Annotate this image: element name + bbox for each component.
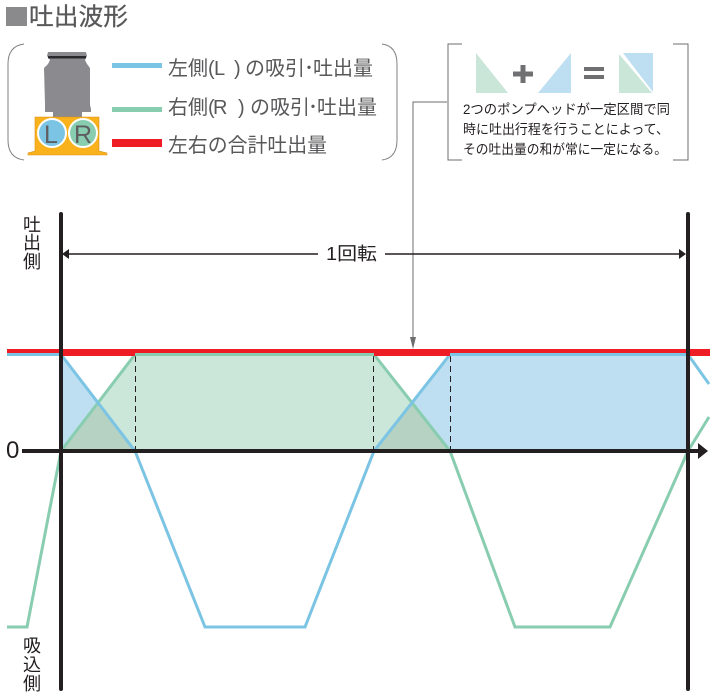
dashed guides bbox=[136, 356, 450, 451]
legend item: right: R bbox=[213, 97, 227, 119]
axis line: start bbox=[59, 212, 63, 691]
line: total discharge bbox=[7, 349, 710, 356]
icon: blue triangle bbox=[538, 53, 571, 93]
legend item: right: 吐出量 bbox=[317, 96, 377, 119]
line: left pump bbox=[7, 354, 709, 627]
arrow: one rotation bbox=[62, 244, 686, 264]
legend item: right: ･ bbox=[308, 97, 318, 119]
label: discharge side: 出 bbox=[23, 233, 41, 253]
legend bracket bbox=[8, 44, 397, 160]
area: left pump first bbox=[61, 355, 135, 451]
icon: pump with L and R heads bbox=[28, 52, 107, 155]
legend item: left: L bbox=[214, 58, 225, 80]
axis line: end bbox=[686, 212, 690, 691]
icon: green triangle bbox=[476, 53, 508, 93]
legend item: left: の吸引 bbox=[245, 57, 305, 80]
legend item: left: ･ bbox=[304, 58, 314, 80]
area: overlap first bbox=[61, 404, 135, 451]
label: discharge side: 吐 bbox=[23, 215, 41, 235]
icon: combined rectangle bbox=[619, 53, 653, 93]
label: zero: 0 bbox=[6, 437, 19, 464]
legend item: right: 右側 bbox=[168, 96, 208, 119]
callout text: 2つのポンプヘッドが一定区間で同 bbox=[463, 102, 670, 117]
callout: constant sum explanation bbox=[448, 44, 688, 160]
label: suction side: 込 bbox=[23, 655, 41, 675]
area: left pump second bbox=[374, 355, 688, 451]
chart: discharge waveform bbox=[6, 212, 710, 694]
label: discharge side bbox=[23, 215, 41, 272]
icon: equals bbox=[584, 69, 604, 77]
icon: pump with L and R heads: L bbox=[44, 121, 58, 149]
arrow: callout leader bbox=[410, 102, 447, 349]
callout text: 時に吐出行程を行うことによって、 bbox=[463, 122, 669, 137]
label: discharge side: 側 bbox=[23, 252, 41, 272]
legend item: left: 左側 bbox=[168, 57, 208, 80]
legend item: total: 左右の合計吐出量 bbox=[168, 134, 327, 157]
panel: legend bbox=[8, 44, 397, 160]
callout text: その吐出量の和が常に一定になる。 bbox=[463, 142, 667, 157]
callout text bbox=[463, 102, 670, 157]
icon: pump with L and R heads: R bbox=[74, 121, 92, 149]
label: suction side: 側 bbox=[23, 674, 41, 694]
area: right pump plateau bbox=[61, 355, 450, 451]
legend item: right: の吸引 bbox=[250, 96, 310, 119]
legend item: left: ( bbox=[208, 58, 215, 80]
legend item: right: ( bbox=[208, 97, 215, 119]
legend item: right: ) bbox=[238, 97, 245, 119]
legend item: left: ) bbox=[234, 58, 241, 80]
legend item: left bbox=[112, 57, 373, 80]
arrow: one rotation: 1回転 bbox=[326, 244, 377, 264]
line: right pump bbox=[7, 354, 709, 627]
area: overlap second bbox=[374, 404, 450, 451]
label: suction side: 吸 bbox=[23, 636, 41, 656]
title: 吐出波形 bbox=[29, 3, 128, 31]
zero axis bbox=[22, 443, 708, 459]
legend item: right bbox=[112, 96, 377, 119]
icon: plus bbox=[513, 65, 533, 83]
label: suction side bbox=[23, 636, 41, 694]
legend item: left: 吐出量 bbox=[313, 57, 373, 80]
